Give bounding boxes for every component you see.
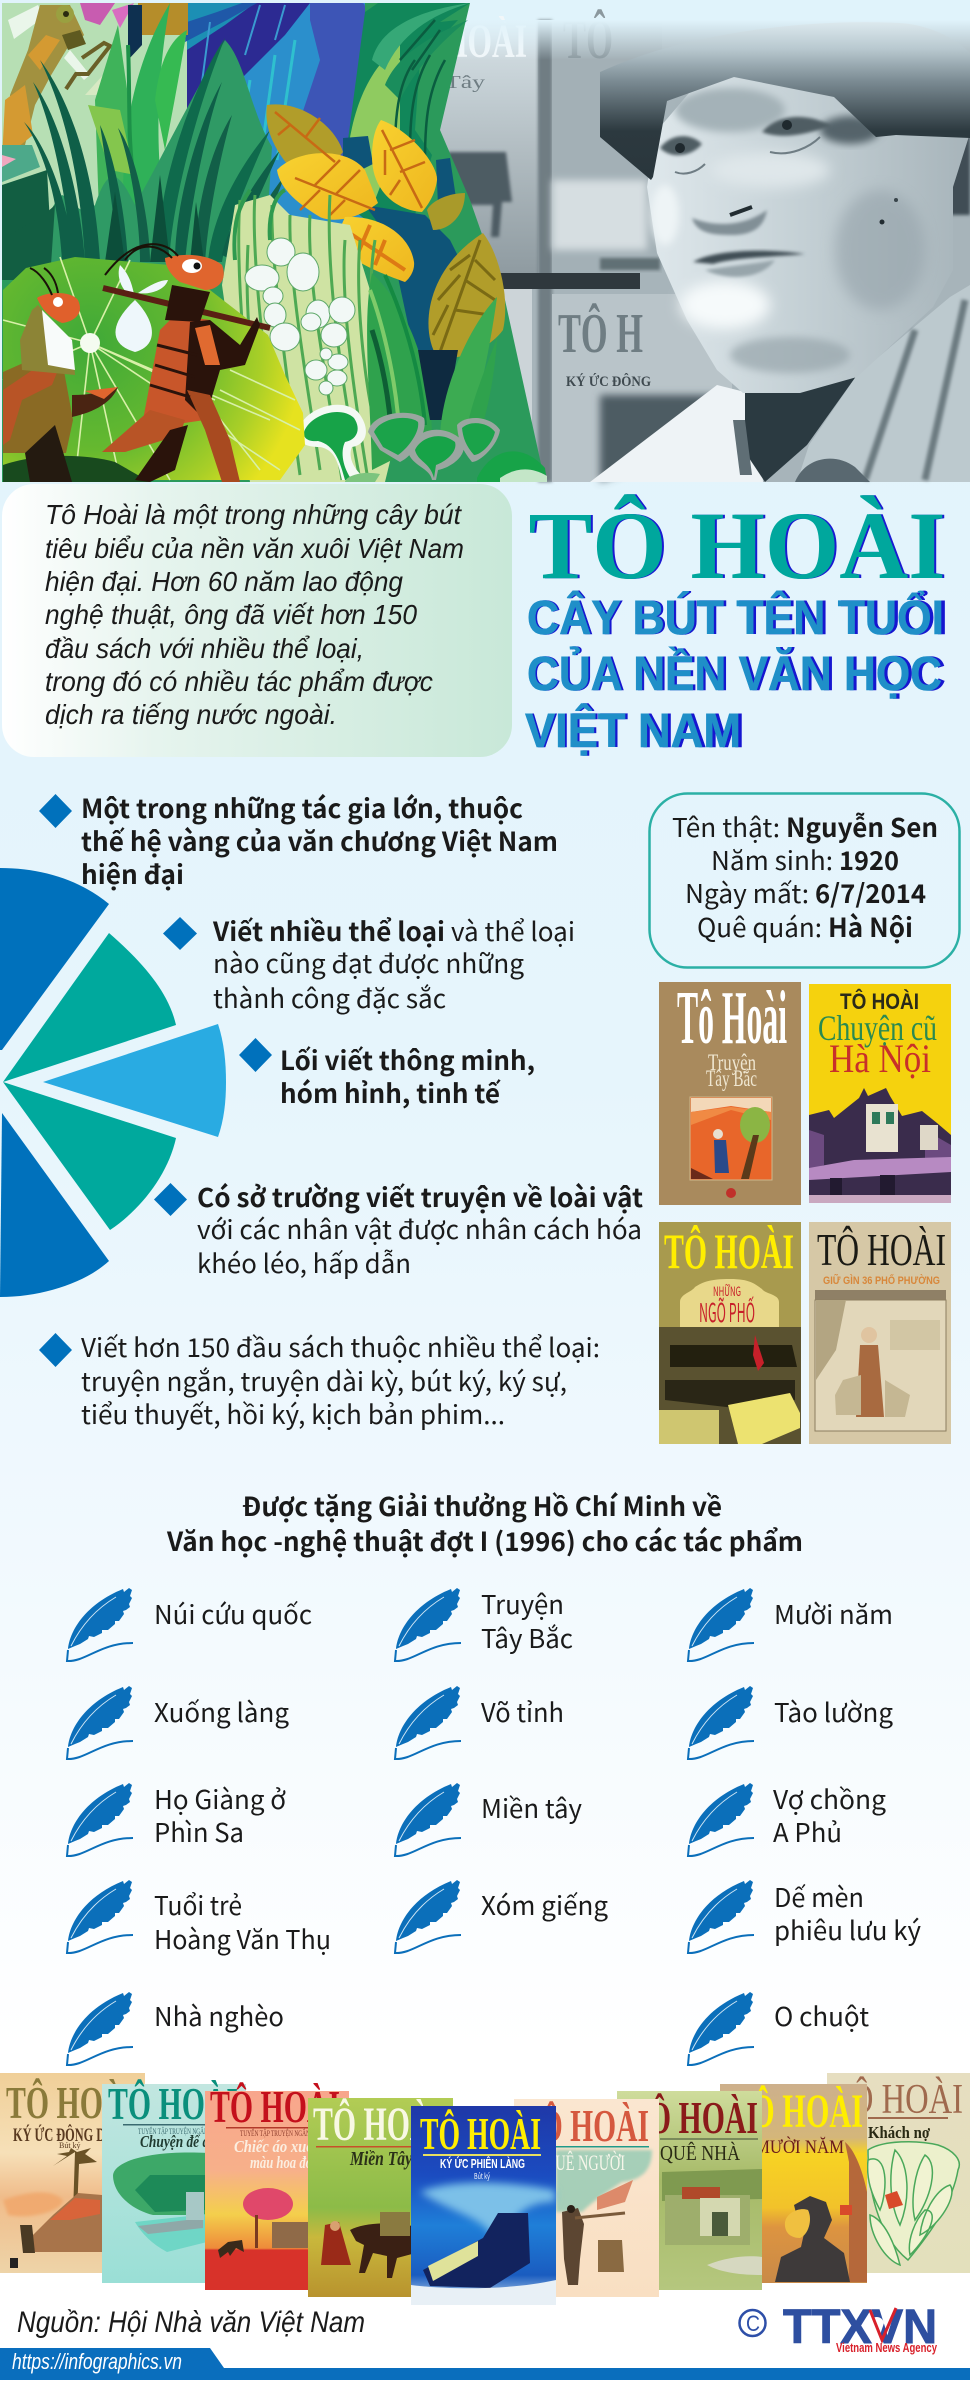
- panel: introduction: [2, 484, 512, 757]
- book 5: Ký ức phiên làng (center): KÝ ỨC PHIÊN LÀNG: [440, 2156, 525, 2171]
- title: TÔ HOÀI: [528, 492, 946, 599]
- book 2: Chuyện để quên: TUYỂN TẬP TRUYỆN NGẮN: [138, 2126, 208, 2136]
- photo: portrait of Tô Hoài with books: TÔ: [563, 8, 613, 71]
- photo: portrait of Tô Hoài with books: HOÀI: [443, 15, 527, 68]
- book 3: Chiếc áo xuống màu hoa đỏ: [205, 2081, 349, 2290]
- work: Truyện Tây Bắc: Tây Bắc: [481, 1619, 573, 1656]
- book 5: Ký ức phiên làng (center): [411, 2106, 556, 2305]
- subtitle: CÂY BÚT TÊN TUỔI: [527, 590, 944, 645]
- intro text: nghệ thuật, ông đã viết hơn 150: [45, 599, 417, 630]
- bullet 3: Lối viết thông minh,: [280, 1041, 535, 1078]
- work: Truyện Tây Bắc: Truyện: [481, 1585, 564, 1622]
- info box: 1920: [839, 841, 899, 878]
- photo: portrait of Tô Hoài with books: Tây: [445, 72, 485, 92]
- book cover: Giữ gìn 36 phố phường: GIỮ GÌN 36 PHỐ PHƯỜNG: [823, 1273, 940, 1287]
- bullet 4: [154, 1178, 643, 1281]
- book 8: Mười năm: [720, 2084, 867, 2283]
- work: Miền tây: [395, 1783, 582, 1856]
- work: Họ Giàng ở Phìn Sa: Họ Giàng ở: [154, 1780, 286, 1817]
- info box: Hà Nội: [828, 908, 913, 945]
- book 8: Mười năm: TÔ HOÀI: [731, 2084, 863, 2138]
- work: Họ Giàng ở Phìn Sa: [67, 1780, 286, 1856]
- book 6: Quê người: [514, 2099, 659, 2297]
- book cover: Những ngõ phố: [659, 1222, 801, 1444]
- info box: Quê quán:: [697, 908, 822, 945]
- bullet 2: thành công đặc sắc: [213, 979, 446, 1016]
- award heading: [166, 1487, 803, 1559]
- photo: portrait of Tô Hoài with books: KÝ ỨC ĐÔNG: [566, 373, 651, 390]
- bullet 4: với các nhân vật được nhân cách hóa: [197, 1210, 642, 1247]
- bullet 5: truyện ngắn, truyện dài kỳ, bút ký, ký sự,: [81, 1362, 567, 1399]
- fan diagram: [0, 868, 226, 1297]
- work: Dế mèn phiêu lưu ký: phiêu lưu ký: [774, 1911, 921, 1948]
- work: Dế mèn phiêu lưu ký: Dế mèn: [774, 1878, 864, 1915]
- logo: TTXVN: C: [746, 2311, 760, 2336]
- grasshopper top-left: [2, 3, 134, 280]
- bullet 1: Một trong những tác gia lớn, thuộc: [81, 789, 523, 826]
- book 2: Chuyện để quên: [102, 2078, 246, 2283]
- bullet 5: tiểu thuyết, hồi ký, kịch bản phim...: [81, 1395, 505, 1432]
- bullet 4: khéo léo, hấp dẫn: [197, 1244, 411, 1281]
- book 6: Quê người: TÔ HOÀI: [520, 2100, 649, 2151]
- bullet 4: Có sở trường viết truyện về loài vật: [197, 1178, 643, 1215]
- dark teal shadows: [343, 136, 480, 380]
- book cover: Chuyện cũ Hà Nội: TÔ HOÀI: [840, 989, 919, 1014]
- book 2: Chuyện để quên: TÔ HOÀI: [108, 2078, 238, 2129]
- book cover: Truyện Tây Bắc: Tây Bắc: [706, 1066, 757, 1091]
- bundle on stick: [103, 265, 270, 352]
- bullet 2: Viết nhiều thể loại: [212, 912, 445, 949]
- award heading: Văn học -nghệ thuật đợt I (1996) cho các tác phẩm: [166, 1522, 803, 1559]
- work: Tuổi trẻ Hoàng Văn Thụ: [67, 1880, 331, 1957]
- yellow leaves: [266, 104, 505, 358]
- info box: Tên thật:: [672, 808, 780, 845]
- bullet 1: hiện đại: [81, 855, 184, 892]
- book cover: Những ngõ phố: TÔ HOÀI: [664, 1223, 794, 1279]
- work: Xóm giếng: [395, 1880, 608, 1953]
- intro text: dịch ra tiếng nước ngoài.: [45, 699, 337, 730]
- work: Họ Giàng ở Phìn Sa: Phìn Sa: [154, 1813, 244, 1850]
- intro text: hiện đại. Hơn 60 năm lao động: [45, 566, 403, 597]
- book 2: Chuyện để quên: Chuyện để quên: [140, 2132, 230, 2151]
- info box: 6/7/2014: [815, 874, 926, 911]
- logo: TTXVN: TTXVN: [783, 2301, 937, 2354]
- subtitle: VIỆT NAM: [526, 703, 744, 758]
- work: O chuột: [688, 1992, 869, 2065]
- book 7: Quê nhà: TÔ HOÀI: [628, 2092, 758, 2143]
- work: Vợ chồng A Phủ: Vợ chồng: [773, 1780, 886, 1817]
- intro text: [45, 499, 464, 730]
- source: Nguồn: Hội Nhà văn Việt Nam: [17, 2306, 365, 2339]
- book 4: Miền Tây: Miền Tây: [349, 2148, 412, 2170]
- bottom green leaves: [298, 405, 547, 482]
- bullet 2: và thể loại: [451, 912, 575, 949]
- book 7: Quê nhà: QUÊ NHÀ: [660, 2141, 741, 2165]
- book 9: Khách nợ: [827, 2073, 970, 2273]
- work: Miền tây: Miền tây: [481, 1789, 582, 1826]
- info box: Nguyễn Sen: [786, 808, 938, 845]
- book 9: Khách nợ: Khách nợ: [868, 2123, 931, 2142]
- work: O chuột: O chuột: [774, 1997, 869, 2034]
- work: Nhà nghèo: [67, 1992, 284, 2065]
- work: Võ tỉnh: Võ tỉnh: [481, 1693, 564, 1730]
- work: Dế mèn phiêu lưu ký: [688, 1878, 921, 1953]
- right cricket: [102, 244, 260, 482]
- work: Tuổi trẻ Hoàng Văn Thụ: Tuổi trẻ: [154, 1886, 242, 1923]
- subtitle: [525, 590, 948, 758]
- book cover: Những ngõ phố: NHỮNG: [713, 1281, 741, 1300]
- white flowers: [245, 238, 355, 395]
- book 1: Ký ức Đông Dương: Bút ký: [59, 2141, 81, 2150]
- blue sky background: [185, 3, 365, 240]
- book cover: Chuyện cũ Hà Nội: [809, 984, 951, 1203]
- work: Tuổi trẻ Hoàng Văn Thụ: Hoàng Văn Thụ: [154, 1920, 331, 1957]
- man's hair: [945, 135, 970, 215]
- book 3: Chiếc áo xuống màu hoa đỏ: Chiếc áo xuống: [234, 2137, 329, 2156]
- intro text: đầu sách với nhiều thể loại,: [45, 633, 364, 664]
- work: Vợ chồng A Phủ: A Phủ: [773, 1813, 842, 1850]
- footer bar with URL: [0, 2348, 970, 2380]
- book cover: Giữ gìn 36 phố phường: [809, 1222, 951, 1444]
- man's hat: [600, 22, 970, 180]
- work: Xuống làng: Xuống làng: [154, 1693, 289, 1730]
- book cover: Chuyện cũ Hà Nội: Chuyện cũ: [818, 1008, 937, 1048]
- bullet 5: [39, 1328, 600, 1432]
- pale striped grass: [222, 190, 400, 482]
- bullet 3: hóm hỉnh, tinh tế: [280, 1074, 501, 1111]
- bullet 2: nào cũng đạt được những: [213, 944, 524, 981]
- work: Mười năm: Mười năm: [774, 1595, 893, 1632]
- bullet 5: Viết hơn 150 đầu sách thuộc nhiều thể loại:: [81, 1328, 600, 1365]
- book 3: Chiếc áo xuống màu hoa đỏ: TUYỂN TẬP TRUYỆN NGẮN: [240, 2128, 310, 2138]
- award heading: Được tặng Giải thưởng Hồ Chí Minh về: [242, 1487, 722, 1524]
- work: Tào lường: Tào lường: [774, 1693, 893, 1730]
- book 6: Quê người: QUÊ NGƯỜI: [545, 2150, 625, 2175]
- info box: Ngày mất:: [685, 874, 809, 911]
- book 1: Ký ức Đông Dương: [0, 2073, 145, 2273]
- subtitle: CÂY BÚT TÊN TUỔI: [528, 590, 948, 645]
- work: Mười năm: [688, 1588, 893, 1661]
- work: Núi cứu quốc: [67, 1588, 312, 1661]
- info box: Năm sinh:: [711, 841, 833, 878]
- work: Núi cứu quốc: Núi cứu quốc: [154, 1595, 312, 1632]
- book cover: Truyện Tây Bắc: Truyện: [708, 1050, 756, 1075]
- logo: TTXVN: Vietnam News Agency: [836, 2340, 938, 2355]
- book 7: Quê nhà: [617, 2091, 762, 2290]
- illustration: crickets in the jungle: [2, 3, 547, 482]
- book cover: Những ngõ phố: NGÕ PHỐ: [699, 1293, 755, 1330]
- intro text: tiêu biểu của nền văn xuôi Việt Nam: [45, 533, 464, 564]
- intro text: trong đó có nhiều tác phẩm được: [45, 666, 433, 697]
- book 1: Ký ức Đông Dương: TÔ HOÀI: [6, 2077, 136, 2128]
- left cricket: [3, 268, 118, 482]
- photo: portrait of Tô Hoài with books: TÔ H: [558, 302, 643, 365]
- works list: [67, 1585, 921, 2065]
- book 8: Mười năm: MƯỜI NĂM: [755, 2136, 844, 2158]
- man's face: [647, 70, 970, 393]
- text: Tô Hoài: [677, 976, 787, 1060]
- book row: [0, 2073, 970, 2305]
- work: Vợ chồng A Phủ: [688, 1780, 886, 1856]
- bullet 1: thế hệ vàng của văn chương Việt Nam: [81, 822, 558, 859]
- bullet 2: [163, 912, 575, 1016]
- subtitle: CỦA NỀN VĂN HỌC: [528, 646, 946, 701]
- book cover: Truyện Tây Bắc: [659, 976, 801, 1205]
- subtitle: CỦA NỀN VĂN HỌC: [527, 646, 942, 701]
- work: Truyện Tây Bắc: [395, 1585, 573, 1661]
- book 4: Miền Tây: [308, 2097, 453, 2297]
- book 5: Ký ức phiên làng (center): TÔ HOÀI: [420, 2108, 541, 2159]
- man's shirt: [590, 285, 970, 482]
- info box: [650, 794, 960, 968]
- book 5: Ký ức phiên làng (center): Bút ký: [474, 2171, 491, 2182]
- work: Xóm giếng: Xóm giếng: [481, 1886, 608, 1923]
- grass: dark central tuft: [2, 38, 285, 285]
- grass: right tuft: [340, 3, 470, 250]
- bullet 1: [39, 789, 558, 892]
- work: Võ tỉnh: [395, 1686, 564, 1759]
- work: Xuống làng: [67, 1686, 289, 1759]
- central light blades: [88, 3, 188, 240]
- footer bar with URL: https://infographics.vn: [12, 2349, 182, 2374]
- intro text: Tô Hoài là một trong những cây bút: [45, 499, 462, 530]
- bullet 3: [239, 1038, 535, 1111]
- photo: portrait of Tô Hoài with books: [433, 8, 970, 482]
- book 4: Miền Tây: TÔ HOÀI: [313, 2097, 443, 2151]
- work: Nhà nghèo: Nhà nghèo: [154, 1997, 284, 2034]
- book 1: Ký ức Đông Dương: KÝ ỨC ĐÔNG DƯƠNG: [13, 2124, 143, 2146]
- title: TÔ HOÀI: [530, 492, 948, 599]
- work: Tào lường: [688, 1686, 893, 1759]
- book cover: Chuyện cũ Hà Nội: Hà Nội: [829, 1036, 931, 1081]
- book 3: Chiếc áo xuống màu hoa đỏ: màu hoa đỏ: [250, 2153, 312, 2172]
- subtitle: VIỆT NAM: [525, 703, 741, 758]
- book 3: Chiếc áo xuống màu hoa đỏ: TÔ HOÀI: [210, 2081, 340, 2132]
- lily pad: [3, 257, 305, 480]
- lower green blades: [367, 273, 497, 470]
